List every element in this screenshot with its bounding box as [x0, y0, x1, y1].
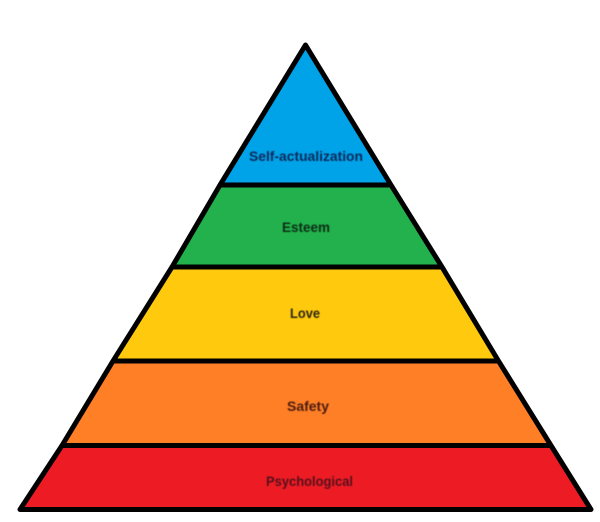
label: Psychological: Psychological [266, 473, 353, 489]
label: Love: Love [290, 305, 320, 321]
label: Self-actualization: Self-actualization [249, 148, 363, 164]
tier: Psychological [20, 446, 591, 510]
tier: Love [113, 267, 498, 361]
tier: Esteem [172, 185, 442, 267]
tier dividers [62, 185, 551, 446]
label: Esteem: Esteem [282, 219, 330, 235]
label: Safety: Safety [287, 398, 329, 414]
tier: Self-actualization [220, 45, 391, 185]
tier: Safety [62, 361, 551, 446]
